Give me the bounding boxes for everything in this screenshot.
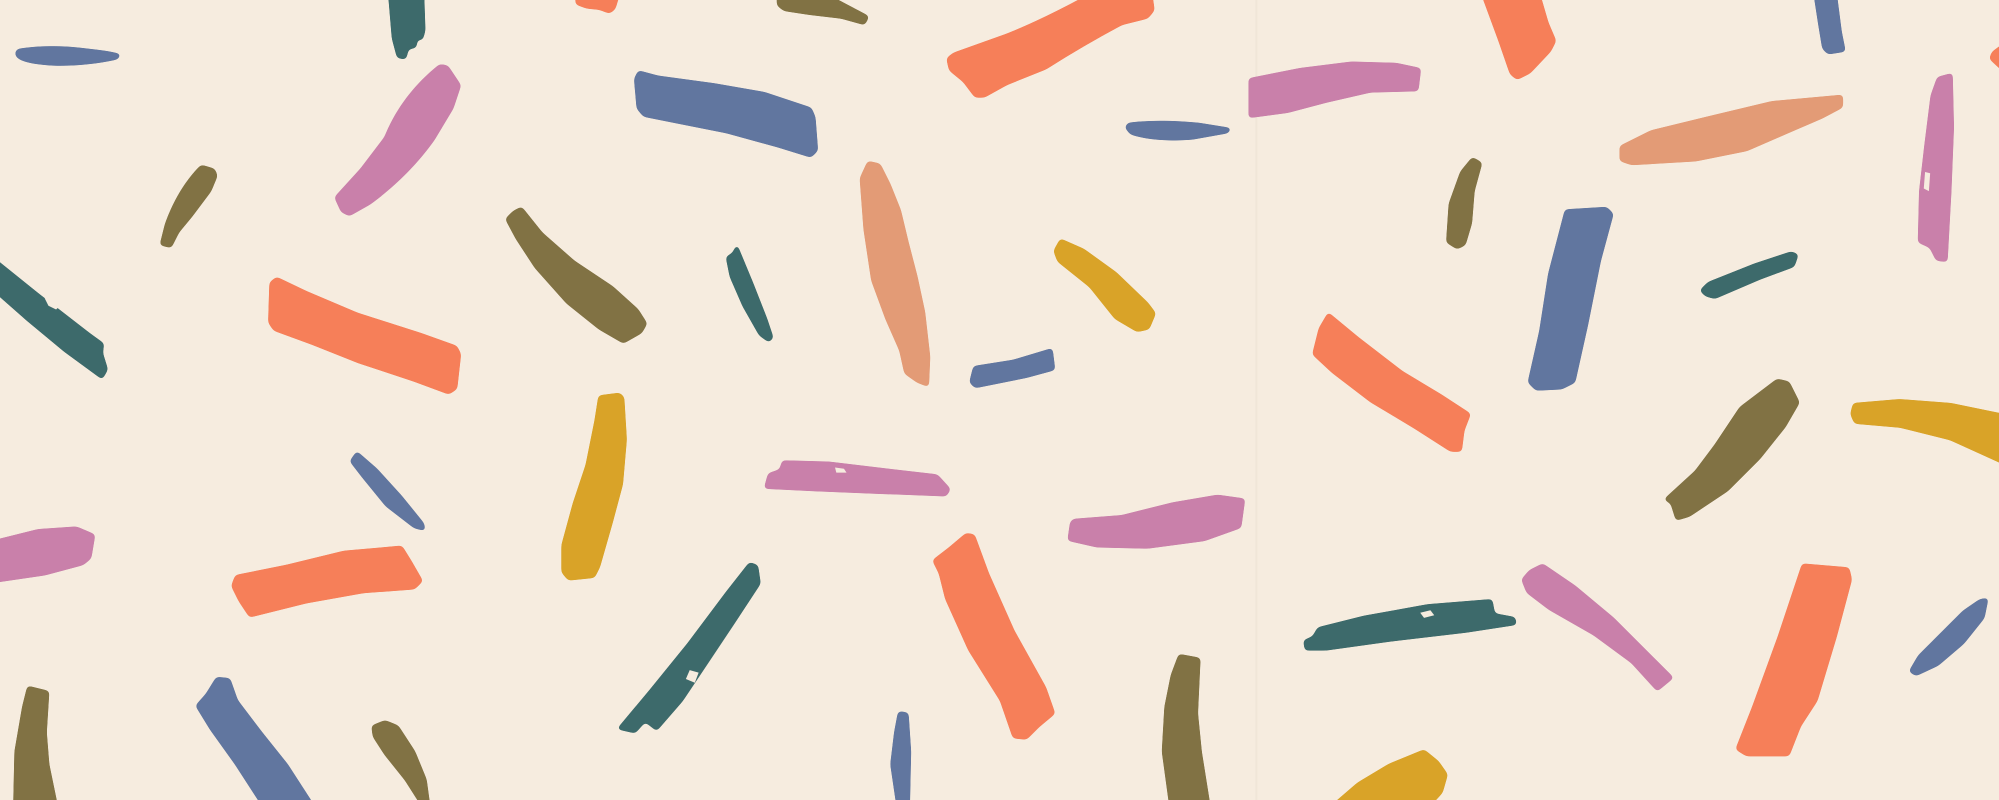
stroke: olive bottom right xyxy=(1163,655,1210,800)
stroke: blue right top xyxy=(1126,122,1230,139)
fleck: teal lower right xyxy=(1420,610,1434,618)
stroke: pink tall right xyxy=(1919,74,1953,261)
stroke: olive top xyxy=(778,0,868,24)
stroke: coral lower left xyxy=(232,546,422,617)
stroke: pink top right xyxy=(1249,62,1420,117)
stroke: teal top xyxy=(389,0,425,59)
stroke: mustard curved xyxy=(1054,239,1155,331)
stroke: coral top clipped xyxy=(576,0,620,13)
stroke: olive small right xyxy=(1447,158,1481,248)
stroke: blue tall right xyxy=(1529,208,1613,390)
stroke: blue lower right xyxy=(1910,599,1988,675)
stroke: coral edge top right xyxy=(1990,42,1999,74)
stroke: pink center xyxy=(765,461,950,496)
seam line xyxy=(1255,0,1257,800)
stroke: mustard bottom xyxy=(1330,750,1447,800)
stroke: teal slim xyxy=(727,246,773,341)
stroke: olive lower left xyxy=(372,721,430,800)
stroke: blue slim xyxy=(351,452,425,530)
stroke: coral top center xyxy=(947,0,1154,97)
stroke: blue bottom xyxy=(891,712,910,800)
stroke: coral lower center xyxy=(933,534,1054,739)
fleck: pink center xyxy=(835,468,847,473)
stroke: mustard right xyxy=(1851,400,1999,465)
stroke: sand right xyxy=(1620,96,1842,164)
stroke: coral left middle xyxy=(269,278,460,394)
stroke: blue top left xyxy=(16,47,120,65)
fleck: pink tall xyxy=(1924,172,1930,191)
stroke: pink right xyxy=(1068,496,1244,548)
stroke: pink far left xyxy=(0,527,94,582)
stroke: blue small center xyxy=(970,349,1054,387)
stroke: olive far left bottom xyxy=(14,687,57,800)
stroke: olive right xyxy=(1665,380,1799,520)
stroke: coral right middle xyxy=(1313,313,1470,451)
stroke: teal far left xyxy=(0,257,107,378)
stroke: blue center top xyxy=(635,71,817,157)
stroke: mustard vertical xyxy=(562,394,626,580)
stroke: coral tall lower right xyxy=(1736,564,1851,755)
stroke: olive middle xyxy=(506,208,646,343)
stroke: olive small xyxy=(161,166,217,247)
stroke: pink upper left xyxy=(335,65,460,215)
stroke: pink lower right xyxy=(1522,564,1673,690)
stroke: teal diagonal lower xyxy=(618,563,760,732)
stroke: teal small right xyxy=(1701,252,1798,298)
stroke: coral top right xyxy=(1481,0,1555,79)
stroke: blue lower left xyxy=(196,678,315,800)
stroke: teal lower right xyxy=(1304,600,1516,650)
fleck: teal diagonal xyxy=(686,670,699,683)
stroke: sand tall xyxy=(861,162,929,386)
fleck: teal left xyxy=(45,298,60,310)
stroke: blue top right xyxy=(1814,0,1845,54)
